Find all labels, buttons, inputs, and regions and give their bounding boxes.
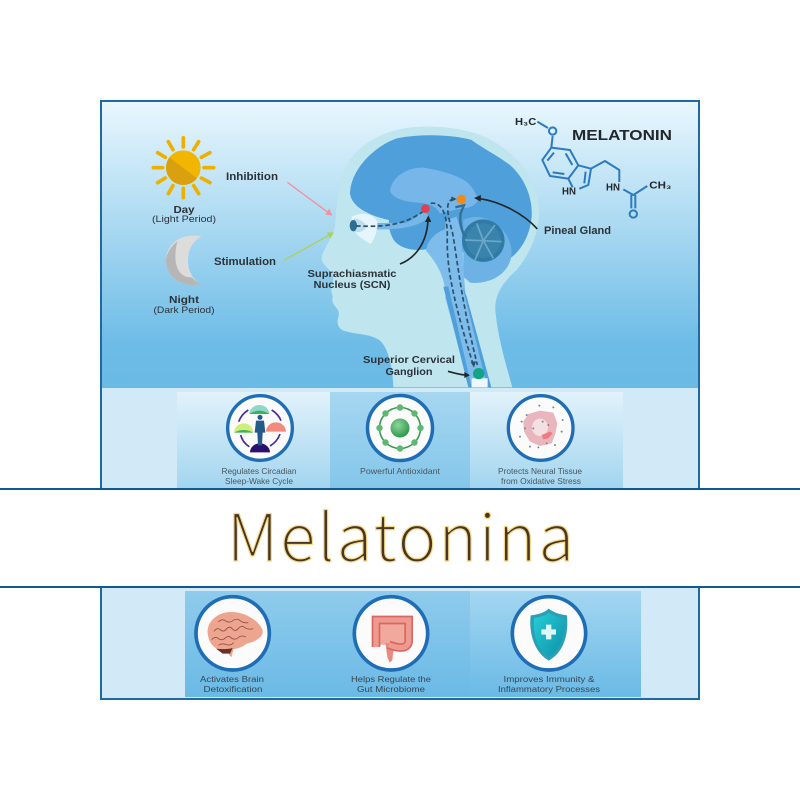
icon: intestine [354,597,428,670]
label: stimulation: Stimulation [214,256,276,268]
arrow: inhibition [287,182,332,216]
label: gut: Gut Microbiome [357,684,425,694]
infographic frame [101,101,699,699]
label: inhibition: Inhibition [226,171,278,183]
heading: MELATONIN: MELATONIN [572,127,672,144]
label: brain [200,674,264,694]
corpus region [390,168,477,213]
label: brain: Activates Brain [200,674,264,684]
icon: sun [153,138,214,198]
pointer: SCN [400,215,431,264]
neural pathway: dashed route [356,199,477,365]
pointer: ganglion [448,371,470,378]
panel: upper and lower backgrounds [100,100,700,700]
title banner [0,486,800,587]
label: night: Night [169,294,200,306]
white ganglion channel [472,378,488,387]
cerebellum [462,219,505,262]
label: gut: Helps Regulate the [351,674,431,684]
label: circadian [222,467,297,486]
label: immunity: Improves Immunity & [504,674,595,684]
eye [350,214,377,244]
icon: neural tissue [508,396,573,460]
icon: brain [196,597,269,670]
head silhouette [322,126,539,387]
label: superior cervical ganglion: Ganglion [386,366,432,378]
brain stem [426,217,466,300]
title: Melatonina [227,486,574,580]
label: night [154,294,214,316]
icon: shield [512,597,586,670]
label: gut [351,674,431,694]
label: neural tissue: Protects Neural Tissue [498,467,582,476]
panel: head and brain diagram [322,117,671,387]
label: night: (Dark Period) [154,305,214,316]
label: brain: Detoxification [204,684,263,694]
melatonin structure: H₃C [515,117,536,128]
label: immunity [498,674,600,694]
panel: light cycle and brain diagram background [101,101,699,388]
optic band [377,209,429,229]
spinal cord [445,297,491,387]
icon: moon [166,236,201,285]
label: day [152,204,216,225]
label: day: Day [174,204,195,216]
arrowheads on pathway [451,196,476,368]
label: neural tissue: from Oxidative Stress [501,477,581,486]
cerebellum housing [463,217,512,283]
label: day: (Light Period) [152,214,216,225]
label: immunity: Inflammatory Processes [498,684,600,694]
cerebrum [350,135,532,258]
brain [350,135,532,300]
label: suprachiasmatic nucleus: Nucleus (SCN) [314,279,390,291]
icon: circadian cycle [228,396,292,460]
panel: lower benefits row [101,588,699,699]
label: neural tissue [498,467,582,486]
melatonin structure: CH₃ [649,180,671,191]
label: superior cervical ganglion [363,354,455,378]
label: antioxidant: Powerful Antioxidant [360,467,441,476]
label: pineal gland: Pineal Gland [544,225,611,237]
pointer: pineal gland [474,195,537,229]
label: circadian: Sleep-Wake Cycle [225,477,293,486]
pineal gland marker [457,195,466,204]
melatonin structure: HN [562,187,576,198]
icon: antioxidant [368,396,432,460]
pineal stalk [455,205,465,237]
label: circadian: Regulates Circadian [222,467,297,476]
label: suprachiasmatic nucleus: Suprachiasmatic [308,268,397,280]
panel: day and night inputs [153,138,334,285]
superior cervical ganglion marker [473,368,484,379]
SCN marker [421,204,430,213]
melatonin structure [515,117,671,218]
label: superior cervical ganglion: Superior Cervical [363,354,455,366]
melatonin structure: HN [606,183,620,194]
panel: upper benefits row [101,390,699,488]
arrow: stimulation [284,232,334,260]
label: suprachiasmatic nucleus [308,268,397,291]
